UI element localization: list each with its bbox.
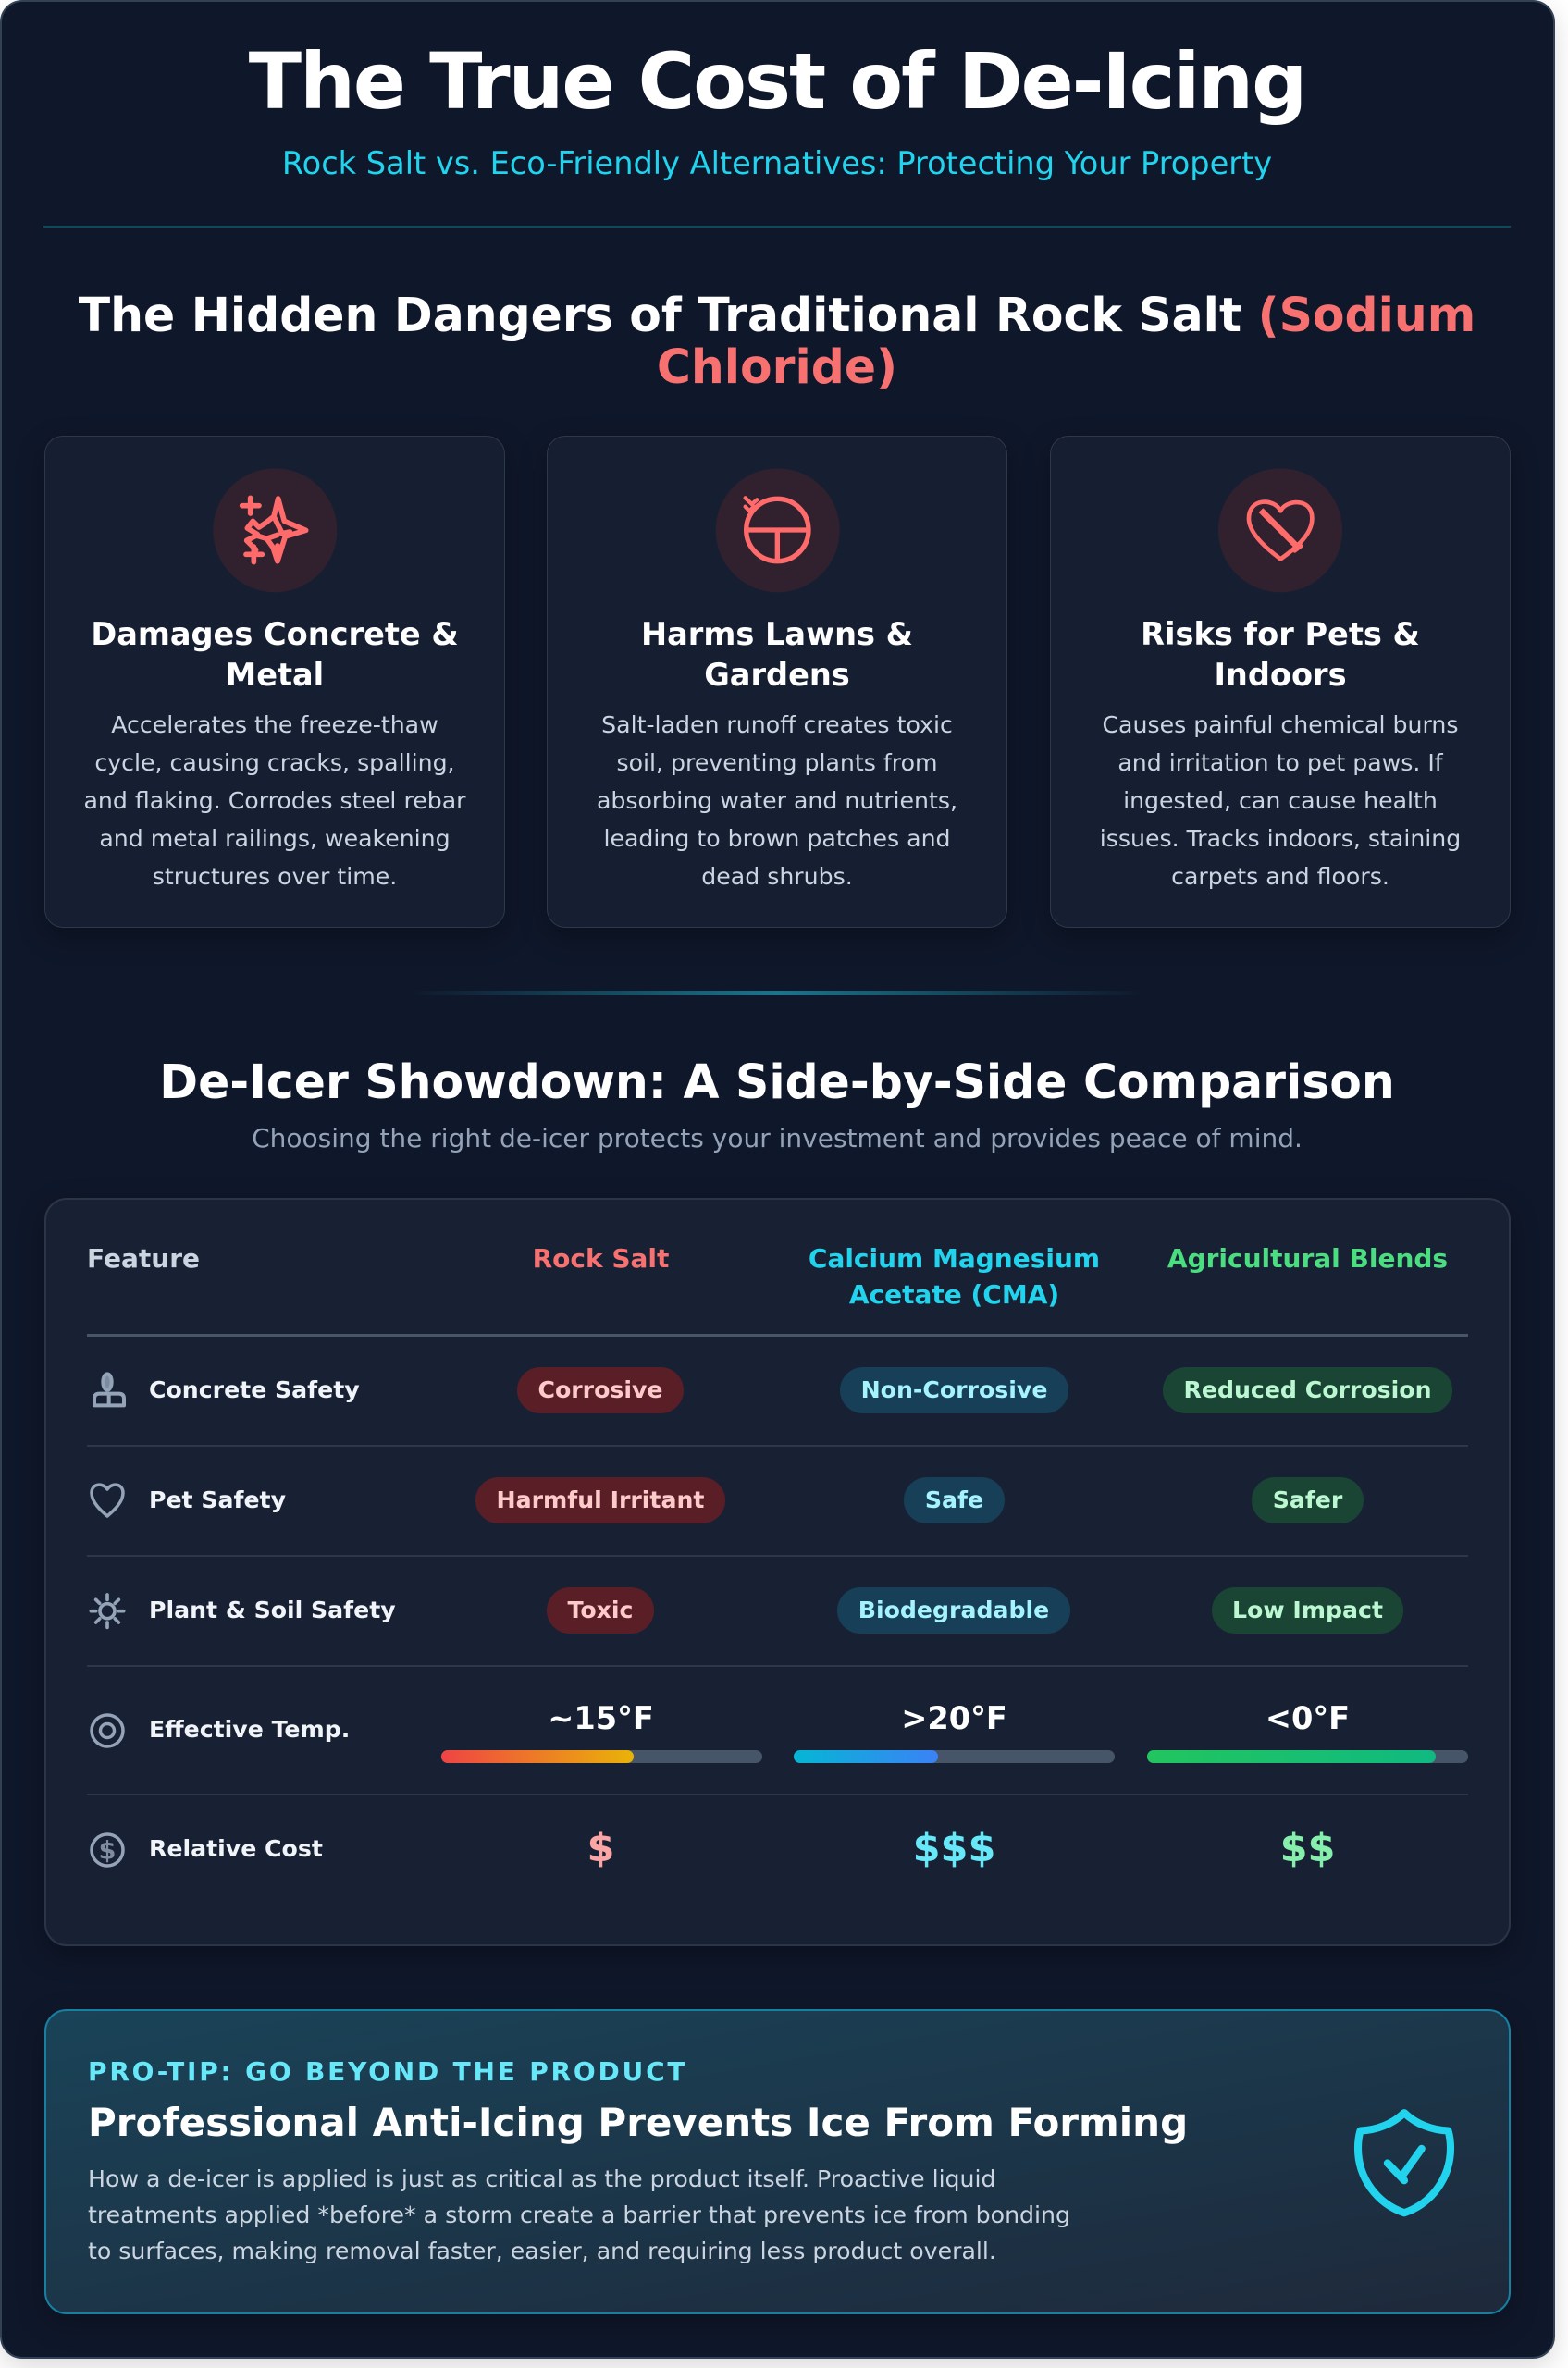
card text: issues. Tracks indoors, staining xyxy=(1100,825,1461,851)
row label: Relative Cost xyxy=(149,1835,323,1861)
row label: Concrete Safety xyxy=(149,1376,360,1402)
value: harmful irritant xyxy=(475,1477,725,1523)
heading: hidden dangers xyxy=(79,288,1475,394)
value: corrosive: Corrosive xyxy=(537,1376,663,1403)
callout text: How a de-icer is applied is just as critical as the product itself. Proactive liquid xyxy=(88,2164,995,2192)
callout text xyxy=(88,2164,1070,2264)
icon: concrete xyxy=(93,1372,126,1408)
icon: shield check xyxy=(1354,2109,1454,2216)
card text xyxy=(597,710,957,890)
value: non-corrosive: Non-Corrosive xyxy=(861,1376,1047,1403)
row: relative cost xyxy=(90,1832,323,1868)
table header: rock salt: Rock Salt xyxy=(533,1243,669,1274)
table header: feature: Feature xyxy=(87,1243,200,1274)
heading: hidden dangers: The Hidden Dangers of Traditional Rock Salt (Sodium xyxy=(79,288,1475,342)
cost: agricultural blends: $$ xyxy=(1280,1825,1335,1871)
value: corrosive xyxy=(517,1367,684,1413)
title: The True Cost of De-Icing xyxy=(249,36,1305,127)
table header: CMA xyxy=(809,1243,1100,1310)
card title: Risks for Pets & xyxy=(1141,616,1420,652)
bar: agricultural blends xyxy=(1147,1750,1468,1763)
callout text: treatments applied *before* a storm create a barrier that prevents ice from bonding xyxy=(88,2202,1070,2227)
card text: leading to brown patches and xyxy=(603,825,951,851)
icon: dollar coin: $ xyxy=(99,1837,116,1865)
card title xyxy=(1141,616,1420,693)
value: low impact xyxy=(1212,1587,1403,1634)
value: reduced corrosion xyxy=(1163,1367,1452,1413)
value: harmful irritant: Harmful Irritant xyxy=(497,1486,704,1513)
card text: Salt-laden runoff creates toxic xyxy=(601,710,953,738)
subtitle: Rock Salt vs. Eco-Friendly Alternatives: Protecting Your Property xyxy=(282,145,1272,181)
icon: cracked star xyxy=(213,468,337,592)
panel: pro-tip callout xyxy=(44,2009,1511,2314)
card text xyxy=(1100,710,1461,890)
eyebrow: PRO-TIP: GO BEYOND THE PRODUCT xyxy=(88,2055,687,2087)
table header: CMA: Calcium Magnesium xyxy=(809,1243,1100,1274)
value: non-corrosive xyxy=(840,1367,1068,1413)
table header: agricultural blends: Agricultural Blends xyxy=(1167,1243,1448,1274)
card text: and flaking. Corrodes steel rebar xyxy=(83,786,466,814)
icon: dollar coin xyxy=(90,1832,125,1868)
showdown subtitle: Choosing the right de-icer protects your investment and provides peace of mind. xyxy=(252,1123,1303,1153)
icon: target xyxy=(90,1713,125,1748)
card text: and metal railings, weakening xyxy=(99,825,451,851)
panel: pets and indoors risk xyxy=(1050,436,1511,928)
card title: Metal xyxy=(226,657,324,693)
icon: sun xyxy=(89,1593,126,1630)
temperature: CMA: >20°F xyxy=(901,1700,1007,1736)
panel: lawns and gardens harm xyxy=(547,436,1007,928)
value: toxic: Toxic xyxy=(568,1597,633,1623)
value: safe xyxy=(904,1477,1005,1523)
row label: Plant & Soil Safety xyxy=(149,1597,396,1622)
icon: crossed heart xyxy=(1218,468,1342,592)
card title: Harms Lawns & xyxy=(641,616,913,652)
value: safer xyxy=(1252,1477,1364,1523)
cost: rock salt: $ xyxy=(587,1825,614,1871)
card text: Accelerates the freeze-thaw xyxy=(111,710,438,738)
card text: Causes painful chemical burns xyxy=(1102,710,1459,738)
card title xyxy=(641,616,913,693)
table header: CMA: Acetate (CMA) xyxy=(849,1279,1059,1310)
card title: Damages Concrete & xyxy=(91,616,459,652)
section divider xyxy=(407,991,1147,995)
card text: and irritation to pet paws. If xyxy=(1117,749,1443,775)
card title: Indoors xyxy=(1214,657,1347,693)
value: biodegradable xyxy=(837,1587,1070,1634)
card text xyxy=(83,710,466,890)
bar: CMA xyxy=(794,1750,1115,1763)
value: low impact: Low Impact xyxy=(1232,1597,1383,1623)
card text: ingested, can cause health xyxy=(1123,786,1438,814)
panel: comparison table xyxy=(44,1198,1511,1946)
temperature: agricultural blends: <0°F xyxy=(1266,1700,1350,1736)
card text: structures over time. xyxy=(153,862,397,890)
panel: concrete and metal damage xyxy=(44,436,505,928)
icon: heart xyxy=(90,1483,125,1518)
bar: rock salt xyxy=(441,1750,762,1763)
cost: CMA: $$$ xyxy=(913,1825,995,1871)
row: concrete safety xyxy=(93,1367,1452,1413)
heading: hidden dangers: Chloride) xyxy=(657,339,897,394)
card title: Gardens xyxy=(704,657,850,693)
row label: Pet Safety xyxy=(149,1486,286,1513)
card text: dead shrubs. xyxy=(701,862,853,890)
card text: absorbing water and nutrients, xyxy=(597,786,957,814)
value: reduced corrosion: Reduced Corrosion xyxy=(1183,1376,1432,1403)
temperature: rock salt: ~15°F xyxy=(548,1700,654,1736)
card title xyxy=(91,616,459,693)
header divider xyxy=(43,226,1511,228)
card text: carpets and floors. xyxy=(1171,862,1389,890)
row label: Effective Temp. xyxy=(149,1715,350,1743)
value: toxic xyxy=(547,1587,654,1634)
row: plant and soil safety xyxy=(89,1587,1403,1634)
card text: cycle, causing cracks, spalling, xyxy=(94,749,455,775)
value: biodegradable: Biodegradable xyxy=(858,1597,1049,1623)
card text: soil, preventing plants from xyxy=(616,749,938,775)
heading: showdown: De-Icer Showdown: A Side-by-Side Comparison xyxy=(159,1054,1395,1109)
row: pet safety xyxy=(90,1477,1364,1523)
value: safer: Safer xyxy=(1273,1486,1342,1513)
callout title: Professional Anti-Icing Prevents Ice From Forming xyxy=(88,2100,1188,2144)
icon: dead lawn circle xyxy=(716,468,840,592)
callout text: to surfaces, making removal faster, easier, and requiring less product overall. xyxy=(88,2237,996,2264)
row: effective temperature xyxy=(90,1713,350,1748)
value: safe: Safe xyxy=(925,1486,983,1513)
